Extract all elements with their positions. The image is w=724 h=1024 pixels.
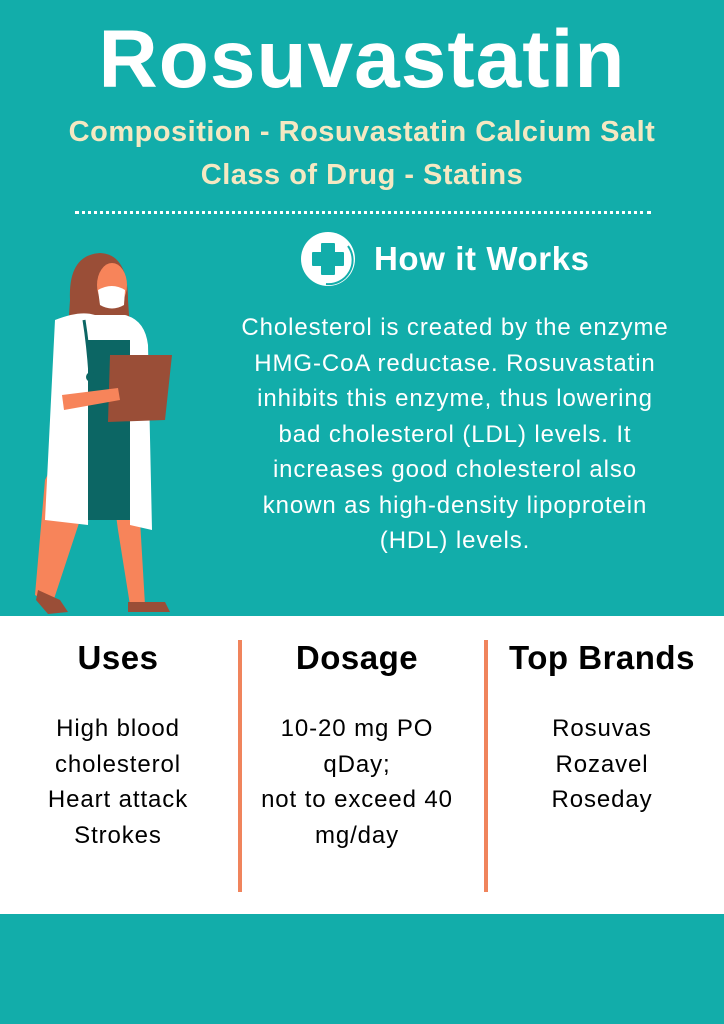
column: top brands: Rozavel [555, 750, 648, 778]
column: dosage: qDay; [323, 750, 391, 778]
column: top brands [509, 639, 695, 813]
icon: medical cross [301, 232, 355, 286]
column: dosage: Dosage [296, 639, 418, 676]
column: dosage [261, 639, 453, 848]
text: explanation: known as high-density lipoprotein [263, 492, 647, 518]
heading: how it works: How it Works [374, 240, 590, 277]
column: uses: cholesterol [55, 750, 181, 778]
column: dosage: 10-20 mg PO [281, 715, 433, 742]
column: dosage: mg/day [315, 822, 399, 848]
subtitle [69, 116, 655, 191]
column: top brands: Rosuvas [552, 715, 652, 742]
column: uses [48, 639, 188, 848]
column: top brands: Top Brands [509, 639, 695, 676]
subtitle: Class of Drug - Statins [201, 159, 523, 191]
column: uses: Heart attack [48, 786, 188, 813]
column: uses: Uses [78, 639, 158, 676]
text: explanation: HMG-CoA reductase. Rosuvastatin [254, 350, 656, 376]
text: explanation: bad cholesterol (LDL) levels. It [279, 420, 631, 448]
text: explanation: increases good cholesterol also [273, 456, 637, 483]
text: explanation: Cholesterol is created by the enzyme [241, 314, 669, 341]
column: uses: Strokes [74, 822, 162, 848]
title: Rosuvastatin [99, 14, 625, 105]
column: dosage: not to exceed 40 [261, 786, 453, 813]
subtitle: Composition - Rosuvastatin Calcium Salt [69, 116, 655, 148]
column: top brands: Roseday [551, 786, 653, 813]
column: uses: High blood [56, 715, 180, 742]
illustration: doctor [35, 253, 172, 614]
text: explanation: (HDL) levels. [380, 527, 530, 554]
text: explanation [241, 314, 669, 554]
text: explanation: inhibits this enzyme, thus lowering [257, 385, 653, 412]
panel: info columns [0, 616, 724, 914]
